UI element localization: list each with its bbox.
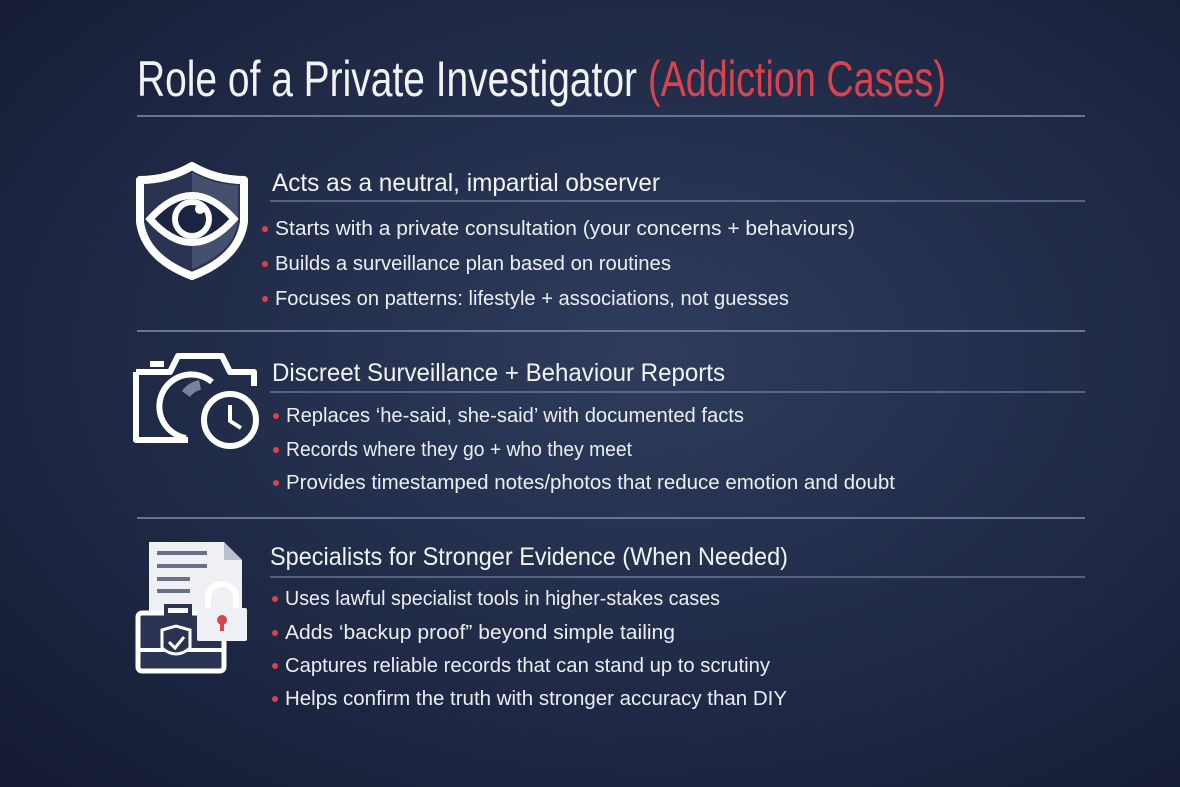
section 1	[262, 169, 1085, 310]
bullets 2: Replaces ‘he-said, she-said’ with documented facts	[286, 405, 744, 427]
bullets 1	[262, 218, 855, 310]
title: (Addiction Cases)	[648, 51, 946, 107]
heading 2: Discreet Surveillance + Behaviour Reports	[272, 359, 725, 387]
bullets 2: Records where they go + who they meet	[286, 439, 632, 461]
bullets 1: Builds a surveillance plan based on routines	[275, 253, 671, 275]
bullets 3: Adds ‘backup proof” beyond simple tailing	[285, 622, 675, 644]
icon: camera with clock	[136, 356, 256, 446]
icon: shield with eye	[140, 166, 244, 276]
title: Role of a Private Investigator	[137, 51, 637, 107]
section 3	[270, 543, 1085, 710]
bullets 2: Provides timestamped notes/photos that reduce emotion and doubt	[286, 472, 895, 494]
section 2	[270, 359, 1085, 494]
bullets 1: Focuses on patterns: lifestyle + associations, not guesses	[275, 288, 789, 310]
heading 1: Acts as a neutral, impartial observer	[272, 169, 660, 197]
icon: document, briefcase, lock	[138, 542, 247, 671]
bullets 3: Helps confirm the truth with stronger accuracy than DIY	[285, 688, 787, 710]
bullets 3	[272, 588, 787, 710]
bullets 3: Uses lawful specialist tools in higher-stakes cases	[285, 588, 720, 610]
bullets 3: Captures reliable records that can stand up to scrutiny	[285, 655, 770, 677]
bullets 1: Starts with a private consultation (your concerns + behaviours)	[275, 218, 855, 240]
heading 3: Specialists for Stronger Evidence (When Needed)	[270, 543, 788, 571]
bullets 2	[273, 405, 895, 494]
